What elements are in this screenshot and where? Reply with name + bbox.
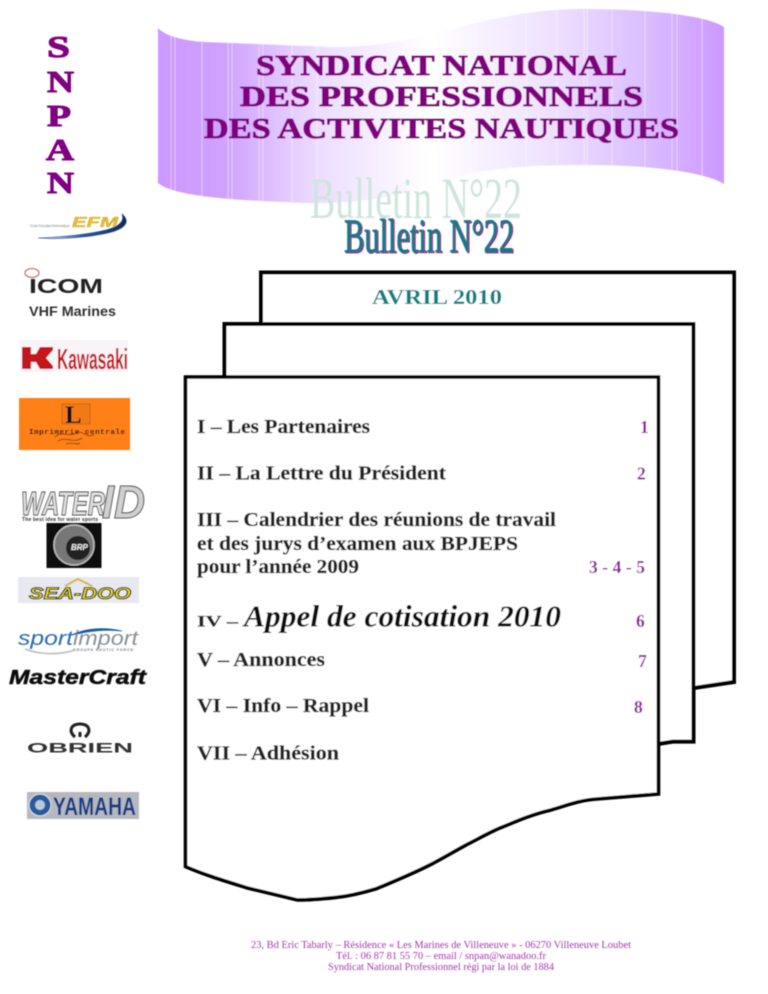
entry VI (197, 695, 643, 717)
logo: Sportimport: GROUPE NAUTIC FORCE (73, 648, 134, 652)
vertical SNPAN wordmark: N (47, 64, 74, 99)
logo: Yamaha: YAMAHA (53, 793, 136, 821)
footer address: Tél. : 06 87 81 55 70 – email / snpan@wanadoo.fr (336, 951, 547, 962)
entry VI: VI – Info – Rappel (197, 695, 369, 717)
logo: Imprimerie centrale: L (65, 402, 82, 429)
logo: Kawasaki: Kawasaki (57, 344, 128, 376)
logo: EFM (30, 214, 126, 239)
entry III (197, 509, 645, 578)
logo: Water ID: ID (102, 476, 145, 528)
vertical SNPAN wordmark: A (46, 132, 75, 167)
entry I: I – Les Partenaires (197, 416, 370, 438)
heading: Bulletin N°22: Bulletin N°22 (344, 210, 514, 263)
logo: Water ID: The best idea for water sports (22, 517, 98, 523)
entry IV: IV – (197, 614, 239, 630)
logo: ICOM VHF Marines: ICOM (29, 276, 103, 298)
footer address: Syndicat National Professionnel régi par la loi de 1884 (328, 962, 554, 973)
front sheet: table of contents (186, 377, 658, 900)
entry II: 2 (637, 464, 646, 484)
middle sheet (224, 324, 694, 744)
entry I (197, 416, 649, 438)
entry III: III – Calendrier des réunions de travail (197, 509, 556, 531)
logo: Sportimport (18, 628, 140, 654)
entry III: pour l’année 2009 (197, 556, 359, 578)
entry IV (197, 598, 645, 634)
heading: Bulletin N°22 (344, 210, 515, 264)
entry III: 3 - 4 - 5 (589, 557, 645, 577)
entry V: V – Annonces (197, 649, 325, 671)
logo: BRP (46, 523, 102, 568)
ghost heading: Bulletin N°22: Bulletin N°22 (310, 166, 522, 231)
logo: ICOM VHF Marines (25, 268, 116, 319)
title: DES PROFESSIONNELS (240, 81, 643, 113)
logo: Sportimport: import (73, 628, 140, 650)
logo: Imprimerie centrale: Imprimerie centrale (29, 429, 125, 437)
logo: Yamaha (27, 792, 139, 821)
vertical SNPAN wordmark: P (47, 98, 71, 133)
vertical SNPAN wordmark (46, 29, 75, 200)
banner: wavy purple flag with title (158, 0, 724, 210)
title: DES ACTIVITES NAUTIQUES (204, 113, 679, 145)
entry IV: 6 (636, 611, 645, 631)
logo: Water ID: WATER (21, 485, 105, 522)
back sheet (261, 272, 734, 688)
logo: Sea-Doo: SEA-DOO (29, 584, 131, 603)
logo: Imprimerie centrale (19, 398, 130, 450)
logo: Sportimport: sport (18, 628, 75, 650)
logo: Sea-Doo (18, 577, 139, 603)
entry V (197, 649, 647, 671)
logo: EFM: Ecole Française Motonautique (30, 223, 71, 228)
title (204, 50, 679, 145)
logo: MasterCraft: MasterCraft (9, 667, 148, 689)
entry VII: VII – Adhésion (197, 742, 340, 764)
vertical SNPAN wordmark: S (47, 29, 70, 64)
logo: ICOM VHF Marines: VHF Marines (29, 303, 116, 319)
entry I: 1 (640, 417, 649, 437)
title: SYNDICAT NATIONAL (256, 50, 627, 82)
entry V: 7 (638, 651, 647, 671)
logo: BRP: BRP (71, 543, 89, 552)
footer address: 23, Bd Eric Tabarly – Résidence « Les Marines de Villeneuve » - 06270 Villeneuve Loubet (251, 940, 631, 951)
entry VI: 8 (634, 697, 643, 717)
logo: Kawasaki (20, 340, 128, 376)
vertical SNPAN wordmark: N (47, 165, 74, 200)
logo: O'Brien (27, 724, 133, 756)
heading: Bulletin N°22: Bulletin N°22 (345, 211, 515, 264)
entry II (197, 462, 646, 484)
entry II: II – La Lettre du Président (197, 462, 446, 484)
logo: O'Brien: OBRIEN (27, 740, 133, 756)
entry IV: Appel de cotisation 2010 (242, 598, 561, 634)
entry III: et des jurys d’examen aux BPJEPS (197, 533, 518, 555)
date: AVRIL 2010: AVRIL 2010 (372, 285, 502, 309)
footer address (251, 940, 631, 973)
logo: EFM: EFM (72, 214, 119, 231)
logo: Water ID (21, 476, 145, 528)
